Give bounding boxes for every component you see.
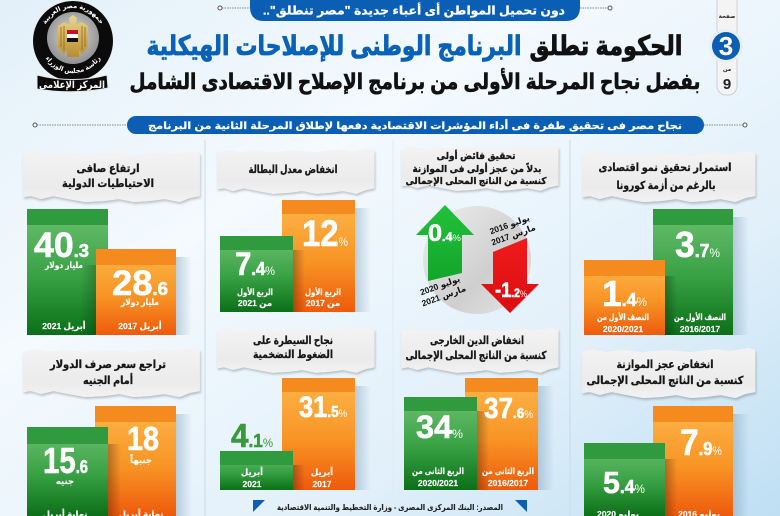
heading: كنسبة من الناتج المحلى الإجمالى (586, 375, 744, 387)
heading (401, 328, 558, 373)
heading: كنسبة من الناتج المحلى الإجمالى (406, 350, 547, 362)
bar chart (220, 378, 371, 490)
bar chart: جنيهاً (129, 453, 152, 466)
bar chart: الربع الأول (237, 287, 273, 298)
title: البرنامج الوطنى للإصلاحات الهيكلية (146, 31, 522, 62)
page tag: 9 (723, 76, 731, 93)
bar chart: أبريل 2021 (42, 320, 86, 332)
panel: unemployment (217, 149, 374, 312)
heading: الضغوط التضخمية (253, 349, 333, 361)
bar chart: النصف الأول من (597, 312, 649, 323)
bar chart: 2020/2021 (603, 324, 643, 334)
bar chart: الربع الثانى من (482, 466, 534, 477)
bar chart: 5.4% (603, 465, 645, 500)
bar chart: 15.6 (43, 440, 88, 481)
bar chart: 2021 (243, 479, 262, 489)
bar chart: 7.9% (680, 422, 722, 463)
bar chart: 37.6% (484, 393, 533, 425)
heading: بدلاً من عجز أولى فى الموازنة (412, 162, 542, 175)
bar chart (584, 209, 749, 335)
bar chart: 2016/2017 (680, 324, 720, 334)
bar chart: مليار دولار (44, 260, 83, 271)
page tag: 3 (719, 31, 733, 61)
bar chart: أبريل 2017 (118, 320, 162, 332)
chart: circular arrows: 0.4% (428, 220, 461, 247)
bar chart: 34% (416, 409, 463, 445)
bar chart: النصف الأول من (674, 312, 726, 323)
panel: external debt (401, 328, 558, 490)
heading (401, 146, 558, 191)
page tag: صفحة (719, 14, 735, 20)
panel: primary surplus (401, 146, 558, 314)
heading (23, 348, 200, 397)
heading: ارتفاع صافى (76, 163, 140, 175)
heading: استمرار تحقيق نمو اقتصادى (598, 162, 732, 174)
panel: budget deficit (582, 348, 755, 516)
source note: المصدر: البنك المركزى المصرى - وزارة التخطيط والتنمية الاقتصادية (277, 503, 503, 512)
emblem: cabinet media center logo: المركز الإعلامى (39, 80, 105, 91)
bar chart: أبريل (311, 466, 333, 478)
panel: inflation (217, 328, 374, 490)
heading: تراجع سعر صرف الدولار (49, 359, 166, 371)
heading (23, 151, 200, 202)
emblem: cabinet media center logo: رئاسة مجلس الوزراء (46, 57, 101, 74)
bar chart: 40.3 (34, 226, 89, 265)
top banner: دون تحميل المواطن أى أعباء جديدة "مصر تنطلق".. (263, 2, 565, 18)
page tag (709, 0, 743, 95)
chart: circular arrows: يوليو 2020 (419, 274, 462, 298)
heading: أمام الجنيه (83, 373, 133, 387)
heading (217, 328, 374, 373)
emblem: cabinet media center logo: جمهورية مصر العربية (43, 6, 102, 24)
bar chart: 31.5% (299, 391, 347, 424)
chart: circular arrows: يوليو 2016 (488, 213, 531, 237)
panel: economic growth (582, 151, 755, 335)
heading (582, 348, 755, 398)
section banner (33, 116, 747, 134)
bar chart: من 2017 (306, 298, 340, 309)
bar chart: أبريل (241, 466, 263, 478)
bar chart (220, 200, 371, 312)
bar chart: 2020/2021 (418, 478, 458, 488)
emblem: cabinet media center logo (33, 1, 113, 92)
chart: circular arrows: -1.2% (495, 279, 527, 302)
bar chart: 2017 (313, 479, 332, 489)
bar chart: من 2021 (238, 298, 272, 309)
page tag: من (723, 67, 731, 73)
bar chart: جنيه (56, 476, 74, 486)
bar chart: مليار دولار (120, 297, 159, 308)
heading (217, 149, 374, 194)
heading: انخفاض الدين الخارجى (430, 335, 524, 347)
bar chart (27, 209, 192, 335)
source note (253, 500, 527, 512)
bar chart: 18 (127, 420, 159, 457)
section banner: نجاح مصر فى تحقيق طفرة فى أداء المؤشرات الاقتصادية دفعها لإطلاق المرحلة الثانية من البرنامج (148, 119, 682, 132)
heading: الاحتياطيات الدولية (62, 178, 154, 190)
bar chart: 28.6 (112, 264, 168, 303)
bar chart: 1.4% (602, 273, 647, 314)
bar chart (584, 406, 749, 516)
bar chart: الربع الأول (305, 287, 341, 298)
top banner (218, 0, 612, 21)
heading: نجاح السيطرة على (253, 335, 333, 347)
heading: انخفاض عجز الموازنة (616, 359, 714, 371)
panel: dollar exchange rate (23, 348, 200, 516)
heading: تحقيق فائض أولى (436, 149, 516, 162)
chart: circular arrows: مارس 2021 (420, 283, 468, 309)
bar chart: 4.1% (231, 417, 273, 454)
bar chart: 3.7% (675, 224, 720, 265)
title: الحكومة تطلق (530, 31, 682, 62)
bar chart: 7.4% (235, 246, 275, 282)
chart: circular arrows (416, 205, 539, 314)
chart: circular arrows: مارس 2017 (490, 222, 537, 248)
bar chart: الربع الثانى من (412, 466, 464, 477)
bar chart (27, 406, 192, 516)
icon: green up arrow (416, 205, 474, 281)
heading (582, 151, 755, 202)
heading: بالرغم من أزمة كورونا (616, 178, 716, 192)
bar chart: 2016/2017 (488, 478, 528, 488)
bar chart: 12% (302, 213, 348, 254)
heading: انخفاض معدل البطالة (248, 164, 338, 176)
icon: golden eagle (58, 15, 88, 57)
bar chart (404, 378, 554, 490)
icon: red down arrow (481, 238, 539, 313)
panel: net international reserves (23, 151, 200, 335)
heading: كنسبة من الناتج المحلى الإجمالى (406, 176, 547, 187)
